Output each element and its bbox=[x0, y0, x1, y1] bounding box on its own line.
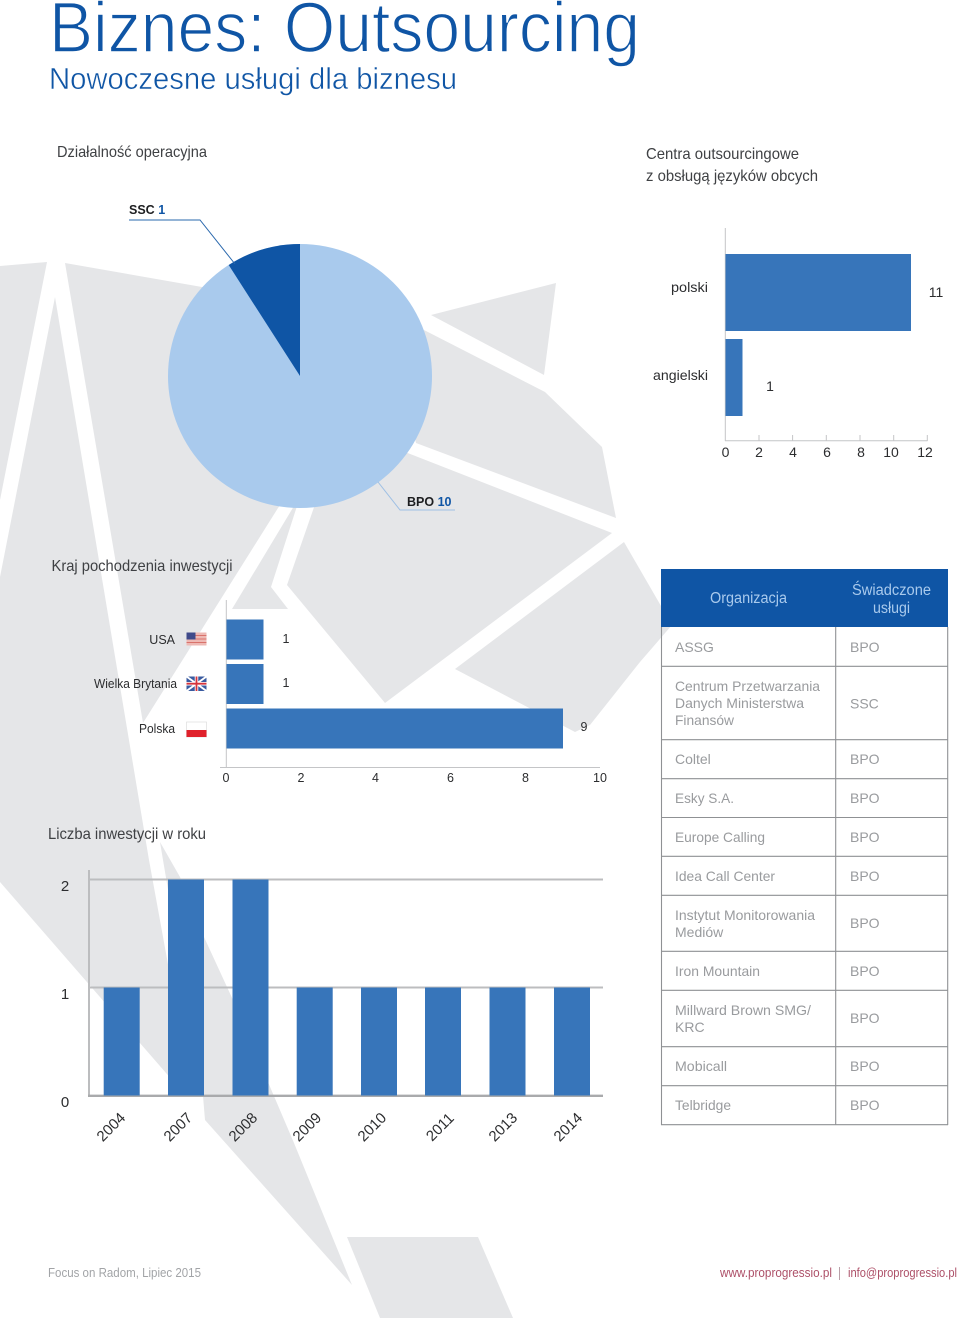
bar chart: countries: 8 bbox=[522, 771, 529, 785]
subtitle: Nowoczesne usługi dla biznesu bbox=[49, 61, 457, 96]
table rows: BPO bbox=[850, 829, 880, 845]
bar chart: languages: 0 bbox=[722, 444, 730, 460]
table rows: ASSG bbox=[675, 639, 714, 655]
bar chart: countries bbox=[94, 600, 607, 785]
heading: operating activity: Działalność operacyjna bbox=[57, 144, 207, 161]
bar chart: investments per year: 2011 bbox=[423, 1110, 458, 1145]
table rows: Centrum Przetwarzania bbox=[675, 678, 820, 694]
table header: usługi bbox=[873, 600, 910, 617]
bar chart: countries: 1 bbox=[283, 632, 290, 646]
bar chart: languages: 1 bbox=[766, 378, 774, 394]
bar chart: countries: 10 bbox=[593, 771, 607, 785]
heading: outsourcing centres: z obsługą języków obcych bbox=[646, 168, 818, 185]
table rows: BPO bbox=[850, 915, 880, 931]
table rows: BPO bbox=[850, 963, 880, 979]
bar chart: languages: 2 bbox=[755, 444, 763, 460]
callout: SSC 1 bbox=[129, 203, 235, 264]
heading: outsourcing centres: Centra outsourcingowe bbox=[646, 146, 799, 163]
bar chart: languages: 11 bbox=[929, 284, 943, 300]
bar chart: investments per year: 2 bbox=[61, 878, 69, 895]
icon: USA flag bbox=[186, 632, 206, 646]
bar chart: countries: 4 bbox=[372, 771, 379, 785]
heading: investments per year: Liczba inwestycji w roku bbox=[48, 826, 206, 843]
bar chart: investments per year: 0 bbox=[61, 1094, 69, 1111]
callout: SSC 1: SSC 1 bbox=[129, 203, 165, 217]
bar chart: countries: 9 bbox=[581, 720, 588, 734]
bar chart: countries: 0 bbox=[223, 771, 230, 785]
footer: source: Focus on Radom, Lipiec 2015 bbox=[48, 1265, 201, 1280]
bar chart: languages: 8 bbox=[857, 444, 865, 460]
bar chart: countries: Polska bbox=[139, 722, 175, 736]
bar chart: investments per year: 2007 bbox=[161, 1110, 196, 1145]
table rows: BPO bbox=[850, 639, 880, 655]
bar chart: investments per year: 2010 bbox=[355, 1110, 390, 1145]
table rows: Iron Mountain bbox=[675, 963, 760, 979]
table rows: Danych Ministerstwa bbox=[675, 695, 804, 711]
table rows: Esky S.A. bbox=[675, 790, 734, 806]
pie chart: operating activity bbox=[168, 244, 432, 508]
bar chart: languages: 4 bbox=[789, 444, 797, 460]
icon: Poland flag bbox=[186, 722, 206, 737]
callout: BPO 10: BPO 10 bbox=[407, 495, 452, 509]
table rows: Idea Call Center bbox=[675, 868, 775, 884]
footer: contact links: www.proprogressio.pl bbox=[719, 1265, 832, 1280]
heading: country of origin: Kraj pochodzenia inwestycji bbox=[52, 558, 232, 575]
table rows: KRC bbox=[675, 1019, 705, 1035]
table rows: Instytut Monitorowania bbox=[675, 907, 815, 923]
table rows: Mediów bbox=[675, 924, 724, 940]
icon: UK flag bbox=[186, 676, 206, 691]
bar chart: languages: 6 bbox=[823, 444, 831, 460]
table rows: Europe Calling bbox=[675, 829, 765, 845]
bar chart: investments per year bbox=[61, 870, 603, 1145]
bar chart: investments per year: 2013 bbox=[486, 1110, 521, 1145]
bar chart: investments per year: 1 bbox=[61, 986, 69, 1003]
table header bbox=[661, 569, 948, 627]
bar chart: investments per year: 2014 bbox=[551, 1110, 586, 1145]
bar chart: countries: 1 bbox=[283, 676, 290, 690]
table rows: Mobicall bbox=[675, 1058, 727, 1074]
table rows: Finansów bbox=[675, 712, 735, 728]
table header: Organizacja bbox=[710, 590, 787, 607]
table rows: BPO bbox=[850, 1058, 880, 1074]
bar chart: languages: 12 bbox=[917, 444, 933, 460]
table rows: Coltel bbox=[675, 751, 711, 767]
table rows: BPO bbox=[850, 1097, 880, 1113]
table rows: Telbridge bbox=[675, 1097, 731, 1113]
bar chart: countries: 2 bbox=[298, 771, 305, 785]
bar chart: countries: 6 bbox=[447, 771, 454, 785]
bar chart: investments per year: 2004 bbox=[94, 1110, 129, 1145]
bar chart: languages: 10 bbox=[883, 444, 899, 460]
table rows: BPO bbox=[850, 790, 880, 806]
bar chart: investments per year: 2009 bbox=[290, 1110, 325, 1145]
bar chart: languages bbox=[653, 228, 943, 460]
table header: Świadczone bbox=[852, 581, 931, 599]
heading: outsourcing centres bbox=[646, 146, 818, 185]
table rows: SSC bbox=[850, 696, 879, 712]
table rows: Millward Brown SMG/ bbox=[675, 1002, 811, 1018]
bar chart: countries: USA bbox=[149, 633, 176, 647]
background: grey polygon pattern bbox=[0, 262, 672, 1318]
bar chart: languages: polski bbox=[671, 279, 708, 295]
table rows: BPO bbox=[850, 1010, 880, 1026]
table: organisations and services bbox=[661, 569, 948, 1125]
bar chart: languages: angielski bbox=[653, 367, 708, 383]
table rows: BPO bbox=[850, 751, 880, 767]
footer: contact links bbox=[719, 1265, 957, 1280]
bar chart: investments per year: 2008 bbox=[226, 1110, 261, 1145]
callout: BPO 10 bbox=[378, 482, 455, 510]
table rows bbox=[675, 639, 880, 1113]
table rows: BPO bbox=[850, 868, 880, 884]
bar chart: countries: Wielka Brytania bbox=[94, 677, 177, 691]
